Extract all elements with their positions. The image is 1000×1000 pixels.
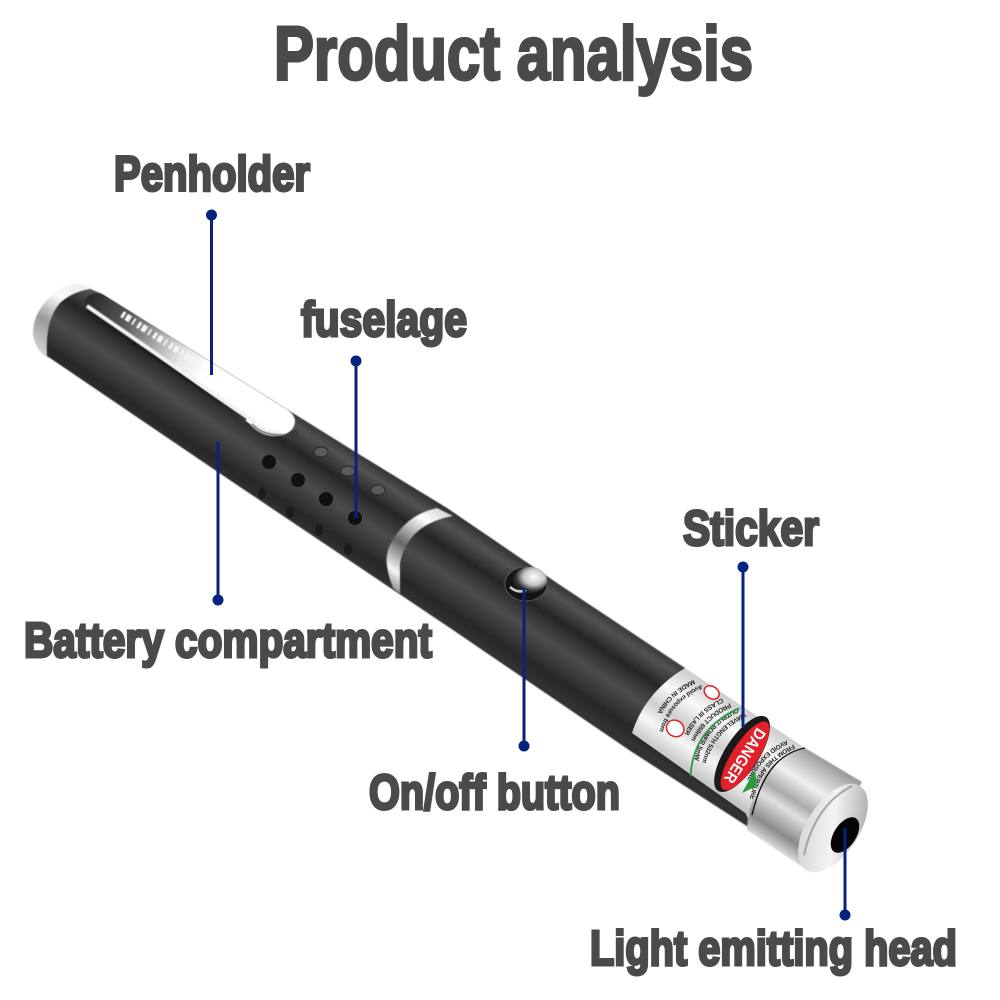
title: Product analysis bbox=[274, 12, 753, 96]
callout: sticker: Sticker bbox=[683, 502, 819, 556]
callout: on/off button: On/off button bbox=[369, 766, 620, 820]
laser pointer pen bbox=[32, 284, 868, 872]
callout: fuselage bbox=[301, 293, 467, 518]
danger label bbox=[704, 708, 780, 800]
danger label: DANGER bbox=[720, 725, 768, 786]
callout: penholder: Penholder bbox=[114, 148, 310, 202]
sticker small print: FROM THIS APERTURE bbox=[750, 744, 795, 800]
silver head bbox=[747, 748, 882, 884]
callout: light emitting head bbox=[590, 828, 957, 976]
callout: sticker bbox=[683, 502, 819, 727]
callout: battery compartment bbox=[24, 442, 432, 668]
warning symbols bbox=[663, 677, 722, 745]
sticker small print: AVOID EXPOSURE bbox=[747, 740, 788, 780]
sticker small print: Avoid exposure from bbox=[660, 684, 702, 732]
sticker small print: CLASS III LASER bbox=[684, 698, 724, 736]
sticker small print: MADE IN CHINA bbox=[658, 680, 696, 714]
callout: on/off button bbox=[369, 588, 620, 820]
sticker small print: WAVELENGTH 532nm bbox=[702, 714, 747, 763]
green arrow bbox=[742, 770, 757, 793]
sticker small print bbox=[658, 680, 795, 800]
lens opening bbox=[825, 812, 865, 858]
on/off button bbox=[505, 567, 547, 601]
pen body bbox=[47, 289, 753, 830]
ventilation holes bbox=[258, 430, 385, 555]
sticker small print: OUTPUT POWER 5mW bbox=[694, 708, 738, 762]
sticker small print: PRODUCT 650nm bbox=[692, 703, 732, 741]
sticker bbox=[632, 668, 804, 815]
silver ring bbox=[387, 508, 453, 594]
pocket clip bbox=[84, 293, 295, 436]
callout: fuselage: fuselage bbox=[301, 293, 467, 347]
tail cap bbox=[33, 284, 95, 358]
callout: penholder bbox=[114, 148, 310, 375]
callout: battery compartment: Battery compartment bbox=[24, 614, 432, 668]
